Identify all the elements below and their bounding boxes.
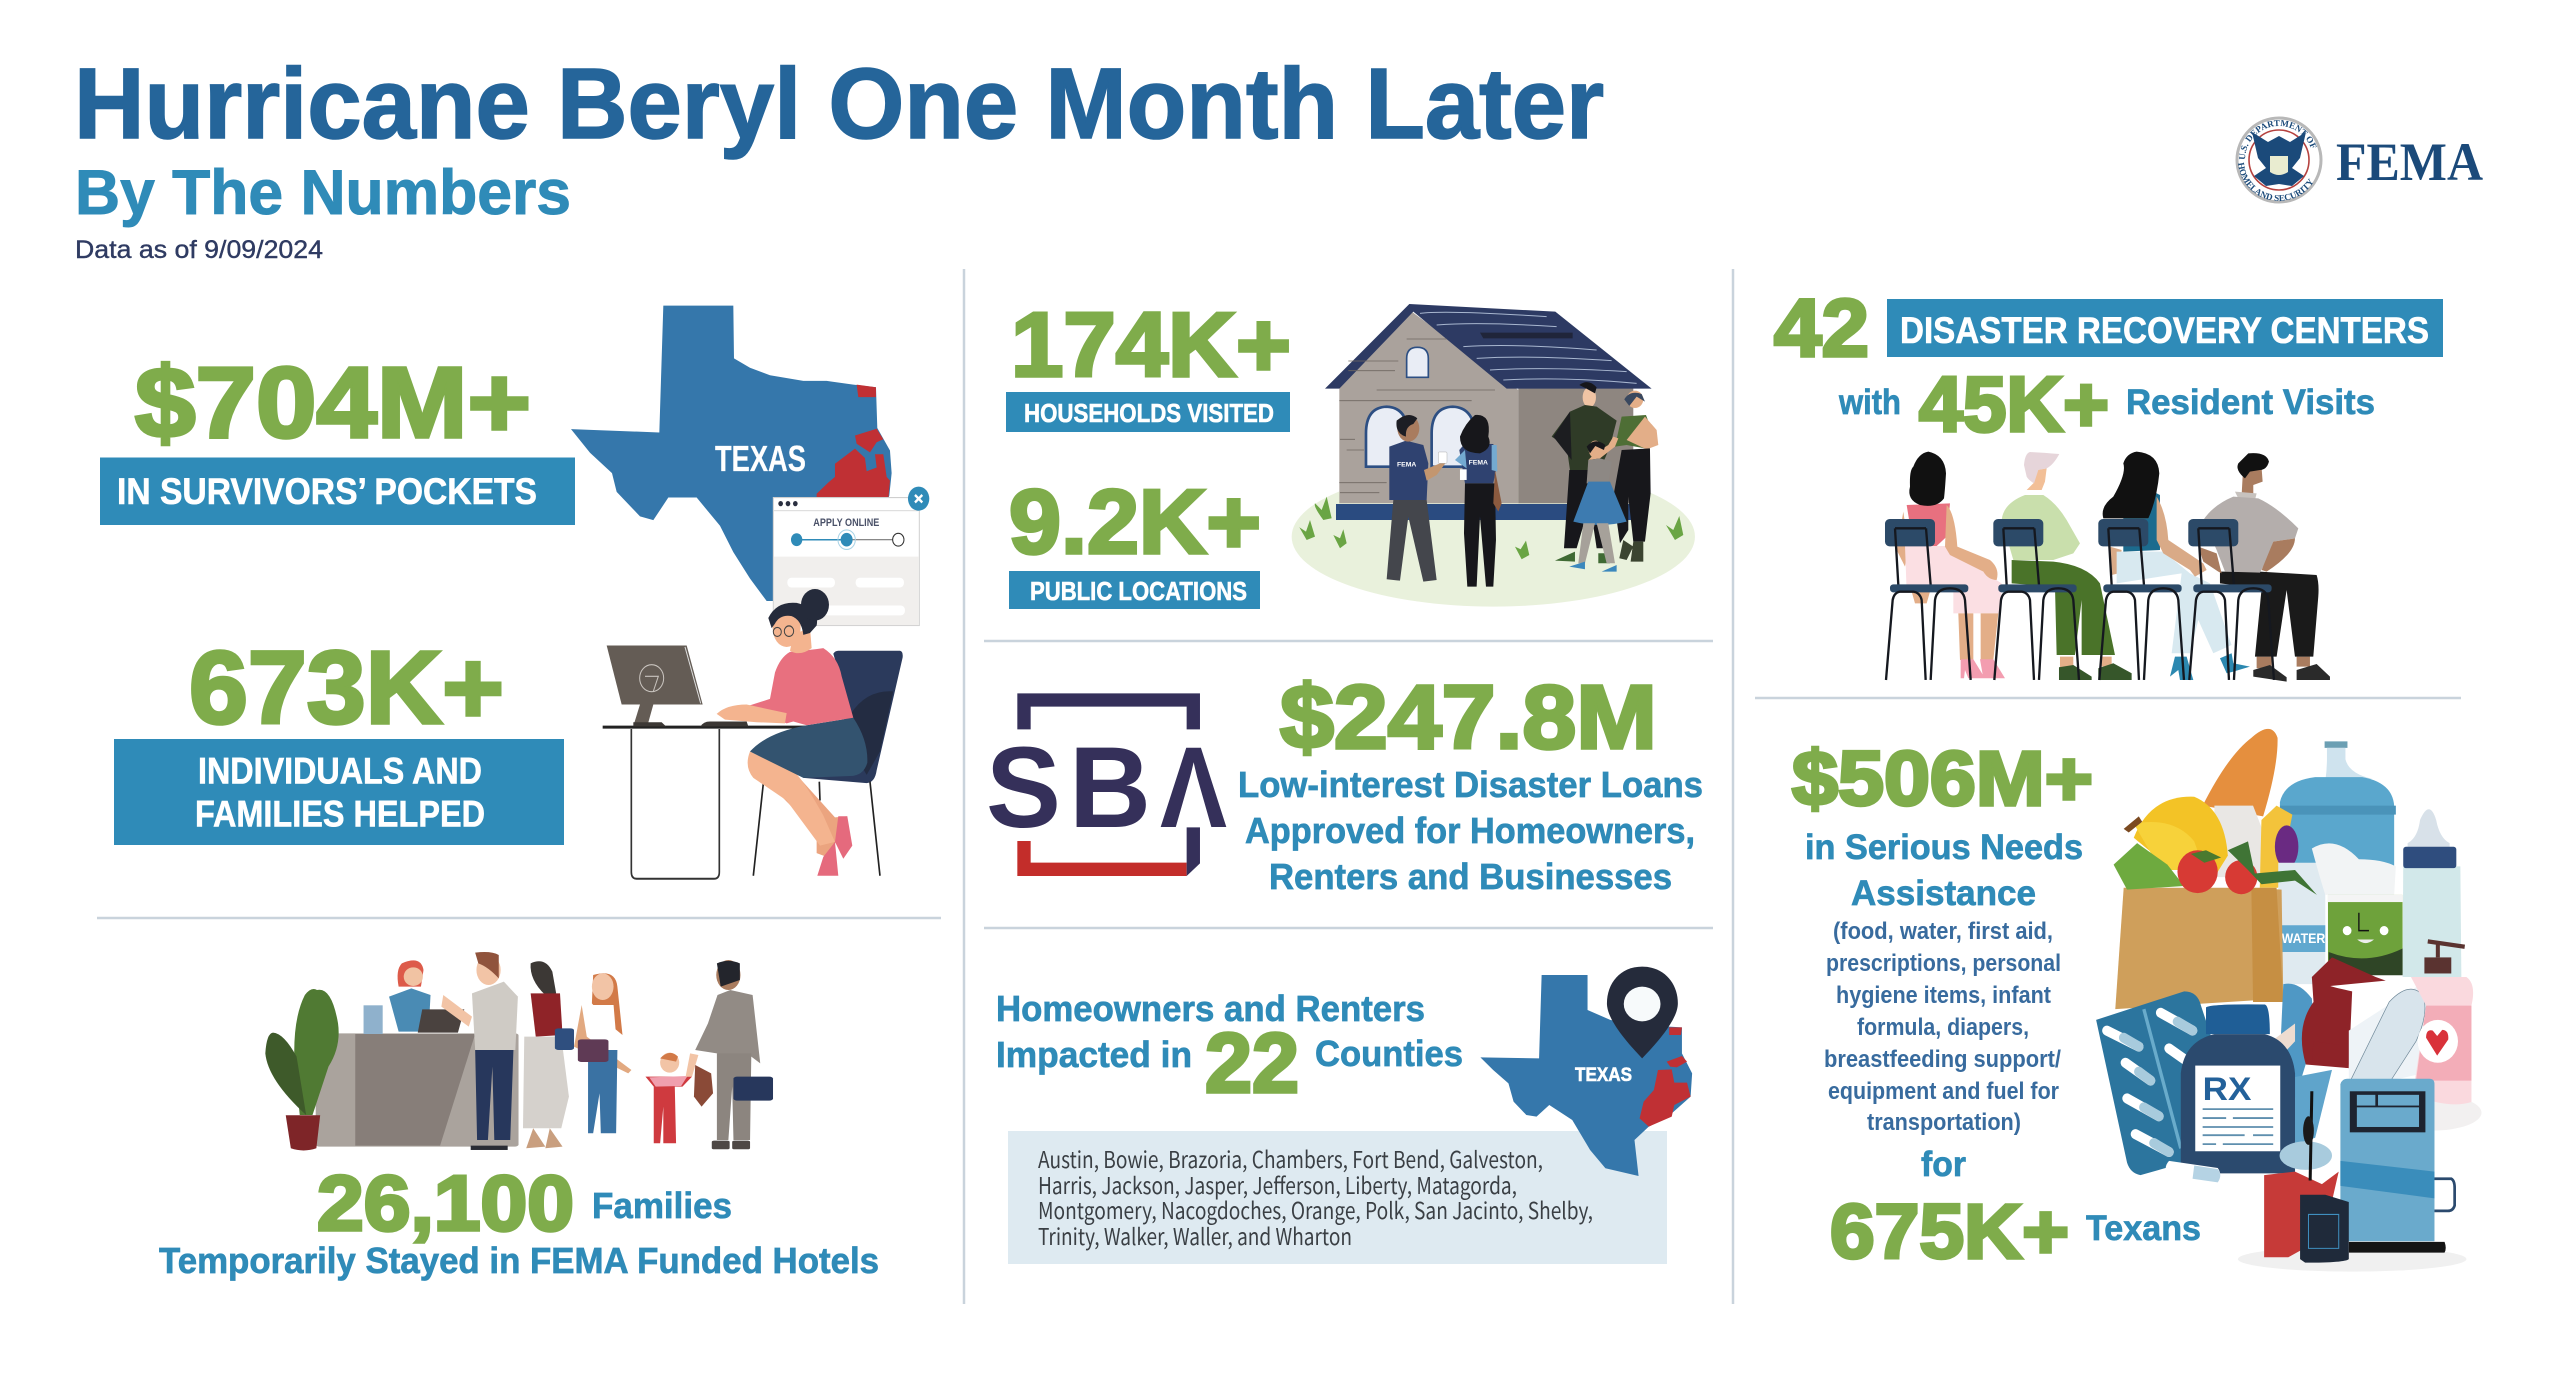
title: Hurricane Beryl One Month Later [74,48,1604,160]
description: eligible items: hygiene items, infant [1836,982,2051,1009]
label: individuals and families helped [114,739,564,845]
map: Texas with location pin [1480,967,1692,1176]
stat: with 45K resident visits: Resident Visits [2126,383,2375,422]
heading: homeowners and renters in 22 counties: Impacted in [996,1034,1192,1075]
caption: low-interest loans [1238,764,1703,897]
description: eligible items [1824,918,2061,1136]
panel: survivors funds and individuals helped [100,306,929,879]
stat: 26,100 families [317,1159,732,1247]
panel: disaster recovery centers [1774,283,2443,682]
panel: impacted counties [996,967,1692,1264]
illustration: FEMA staff visiting family at house: FEMA [1397,462,1417,469]
FEMA wordmark: FEMA [2336,132,2483,192]
description: eligible items: (food, water, first aid, [1833,918,2053,945]
county list box: Harris, Jackson, Jasper, Jefferson, Liberty, Matagorda, [1038,1167,1517,1201]
stat: with 45K resident visits: with [1838,383,1901,422]
stat: 174K: 174K+ [1011,295,1291,396]
label: public locations [1009,571,1260,609]
illustration: food, water, medicine, fuel supplies: WATER [2282,930,2325,946]
map: Texas with affected counties: TEXAS [715,439,806,479]
label: households visited [1006,392,1290,432]
label: in survivors pockets: IN SURVIVORS’ POCKETS [117,471,537,512]
logo text: SBA letters [986,724,1227,852]
subtitle: By The Numbers [75,158,571,228]
apply online window: APPLY ONLINE [813,516,879,529]
panel: household visits [1006,295,1695,609]
description: eligible items: breastfeeding support/ [1824,1046,2061,1073]
logo: SBA bracket [1017,693,1200,876]
word: for: for [1921,1145,1966,1184]
heading: homeowners and renters in 22 counties: Counties [1315,1033,1463,1074]
logo text: SBA letters: S [986,724,1061,852]
stat: 704M: $704M+ [135,347,531,459]
description: eligible items: formula, diapers, [1857,1014,2029,1041]
caption: temporarily stayed in hotels: Temporarily Stayed in FEMA Funded Hotels [159,1240,879,1281]
logo text: SBA letters: Λ [1160,724,1227,852]
stat: 9.2K: 9.2K+ [1009,472,1261,573]
label: individuals and families helped: INDIVIDUALS AND [198,750,482,792]
stat: 673K: 673K+ [189,630,504,745]
caption: in serious needs assistance: Assistance [1851,874,2036,913]
stat: 42: 42 [1774,283,1869,374]
caption: low-interest loans: Approved for Homeowners, [1245,810,1695,851]
county list box: Montgomery, Nacogdoches, Orange, Polk, San Jacinto, Shelby, [1038,1192,1593,1226]
heading: homeowners and renters in 22 counties: Homeowners and Renters [996,988,1425,1029]
illustration: food, water, medicine, fuel supplies: RX [2203,1070,2251,1107]
illustration: FEMA staff visiting family at house [1292,304,1695,607]
label: disaster recovery centers: DISASTER RECOVERY CENTERS [1900,310,2429,351]
label: individuals and families helped: FAMILIES HELPED [195,794,485,834]
stat: 506M: $506M+ [1792,736,2093,822]
illustration: FEMA staff visiting family at house: FEMA [1469,459,1488,466]
description: eligible items: equipment and fuel for [1828,1078,2059,1105]
county list box [1008,1131,1667,1264]
caption: in serious needs assistance: in Serious Needs [1805,828,2083,867]
data date: Data as of 9/09/2024 [75,236,323,264]
heading: homeowners and renters in 22 counties: 22 [1205,1016,1299,1110]
county list box: Trinity, Walker, Waller, and Wharton [1038,1218,1352,1252]
stat: 675K Texans: Texans [2086,1209,2201,1248]
illustration: woman at computer [603,589,903,879]
stat: 26,100 families: Families [592,1185,732,1226]
description: eligible items: prescriptions, personal [1826,950,2061,977]
panel: SBA loans [986,668,1703,897]
map: Texas with affected counties [571,306,892,601]
DHS seal: HOMELAND SECURITY [2238,162,2313,202]
heading: homeowners and renters in 22 counties [996,988,1463,1110]
label: in survivors pockets [100,458,575,525]
logo text: SBA letters: B [1069,724,1151,852]
panel: hotels [159,952,879,1281]
caption: in serious needs assistance [1805,828,2083,913]
panel: serious needs assistance [1792,729,2482,1275]
map label: TEXAS [1575,1065,1632,1086]
label: households visited: HOUSEHOLDS VISITED [1024,398,1274,428]
illustration: food, water, medicine, fuel supplies [2096,729,2482,1272]
apply online window [773,487,929,625]
stat: with 45K resident visits [1838,360,2375,448]
county list box: Austin, Bowie, Brazoria, Chambers, Fort Bend, Galveston, [1038,1141,1543,1175]
stat: 675K Texans [1830,1189,2201,1275]
description: eligible items: transportation) [1867,1109,2021,1136]
stat: with 45K resident visits: 45K+ [1919,360,2109,448]
stat: 675K Texans: 675K+ [1830,1189,2069,1275]
illustration: four seated residents [1885,452,2330,682]
label: disaster recovery centers [1887,299,2443,357]
DHS seal: U.S. DEPARTMENT OF [2239,120,2317,160]
caption: low-interest loans: Low-interest Disaster Loans [1238,764,1703,805]
caption: low-interest loans: Renters and Businesses [1269,856,1672,897]
illustration: hotel front desk and families [265,952,773,1150]
DHS seal [2236,116,2322,204]
stat: 26,100 families: 26,100 [317,1159,574,1247]
stat: 247.8M: $247.8M [1280,668,1657,768]
FEMA logo [2236,116,2483,204]
label: public locations: PUBLIC LOCATIONS [1030,576,1247,606]
